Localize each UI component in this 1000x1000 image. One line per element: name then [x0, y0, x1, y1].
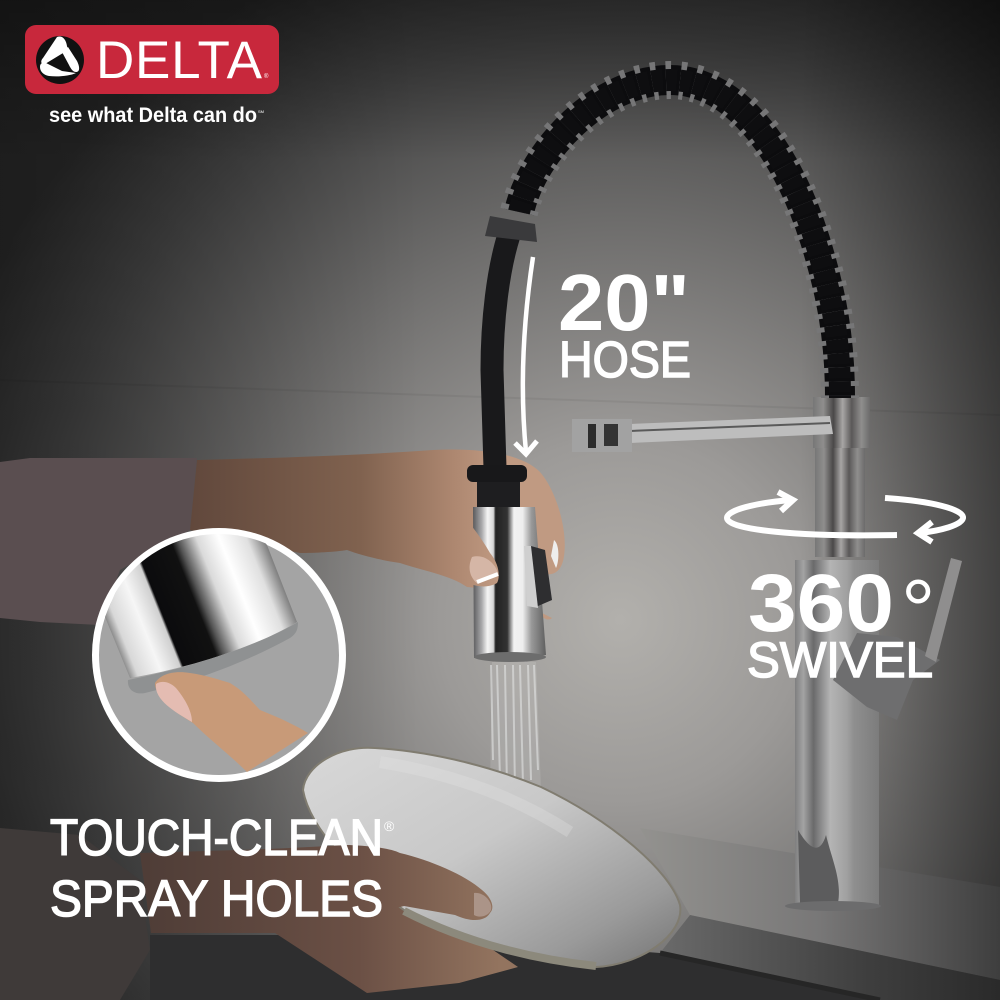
lower hand and sleeve: [0, 828, 518, 1000]
spray head: [467, 465, 552, 662]
label: touch-clean spray holes: ®: [384, 818, 395, 834]
label: 20" hose: 20": [558, 258, 690, 347]
logo: tagline: see what Delta can do: [49, 104, 257, 127]
label: 360 swivel: °: [901, 563, 935, 659]
logo: red badge: [25, 25, 279, 94]
hand holding spray head: [190, 450, 565, 620]
thumb over spray head: [420, 490, 499, 586]
Delta logo: [25, 25, 279, 127]
black flexible hose: [485, 216, 537, 468]
label: touch-clean spray holes: [50, 809, 395, 927]
label: touch-clean spray holes: TOUCH-CLEAN: [50, 809, 383, 866]
label: 20" hose: HOSE: [559, 331, 691, 388]
label: 20" hose: [558, 258, 691, 388]
label: 360 swivel: [747, 558, 935, 688]
plate: [303, 748, 680, 967]
counter top and sink: [150, 828, 1000, 1000]
label: 360 swivel: SWIVEL: [747, 632, 933, 688]
logo: registered mark: ®: [264, 73, 269, 80]
coiled spring hose: [519, 80, 840, 398]
rotation arrows: [727, 492, 963, 542]
faucet column with mount: [785, 397, 962, 911]
hand and thumb over plate: [250, 845, 492, 933]
20 inch hose arrow: [515, 257, 537, 454]
label: 360 swivel: 360: [748, 558, 894, 649]
inset: chrome spray head: [105, 534, 297, 678]
inset: fingertip: [155, 672, 308, 772]
spray holder arm: [572, 416, 833, 452]
logo: wordmark: DELTA: [96, 31, 263, 90]
sleeve: left arm: [0, 458, 197, 625]
inset circle: spray holes close-up: [92, 500, 346, 782]
logo: service mark: SM: [258, 109, 264, 114]
logo: triangle mark: [36, 36, 84, 84]
water spray: [490, 662, 542, 815]
label: touch-clean spray holes: SPRAY HOLES: [50, 870, 383, 927]
inset: spray face ring: [128, 622, 298, 693]
